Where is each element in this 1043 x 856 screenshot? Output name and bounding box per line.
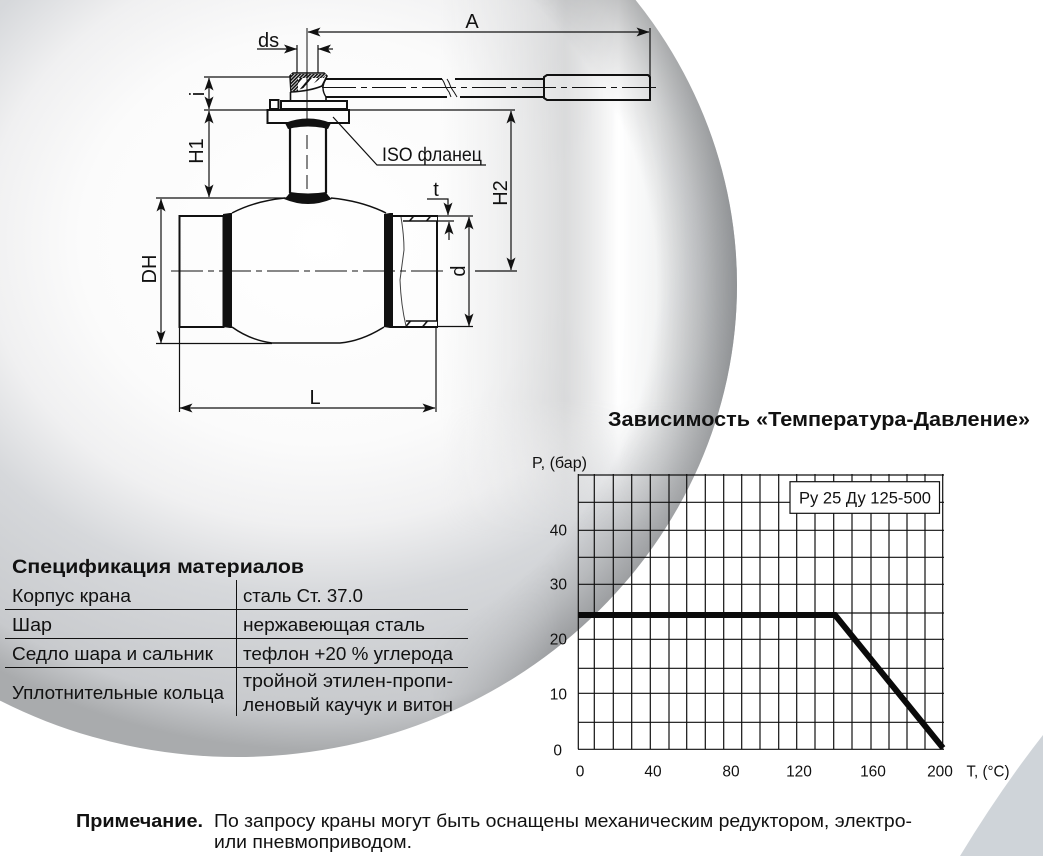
x axis labels: 80: [722, 764, 740, 780]
note: или пневмоприводом.: [214, 831, 412, 852]
background sphere: [0, 0, 740, 760]
table rows: Шар: [12, 614, 52, 635]
y axis labels: 10: [550, 686, 567, 704]
x axis labels: 120: [786, 764, 812, 780]
x axis labels: [576, 764, 1010, 780]
materials table: [5, 556, 468, 716]
dimension ds: [257, 30, 333, 73]
note: По запросу краны могут быть оснащены механическим редуктором, электро-: [214, 810, 912, 831]
x axis labels: 160: [860, 764, 886, 780]
table rows: Уплотнительные кольца: [12, 682, 225, 703]
table rows: Седло шара и сальник: [12, 643, 214, 664]
chart legend box: [790, 482, 940, 513]
table heading: Спецификация материалов: [12, 556, 304, 578]
table rows: леновый каучук и витон: [243, 694, 453, 715]
dimension H1: [156, 111, 286, 198]
dimension ds: ds: [258, 30, 279, 52]
valve body: [180, 198, 437, 343]
table rules: [5, 580, 468, 716]
temperature pressure chart: [532, 455, 1010, 780]
dimension H1: H1: [186, 138, 208, 164]
table rows: Корпус крана: [12, 585, 132, 606]
dimension L: L: [309, 387, 321, 409]
y axis labels: 20: [550, 632, 567, 648]
y axis labels: P, (бар): [532, 455, 587, 472]
neck: [284, 128, 332, 204]
dimension d: d: [448, 265, 470, 277]
y axis labels: 30: [550, 576, 567, 594]
y axis labels: [532, 455, 587, 760]
table rows: [12, 585, 454, 715]
dimension L: [180, 327, 436, 412]
table rows: тройной этилен-пропи-: [243, 670, 453, 691]
valve technical drawing: [139, 11, 656, 412]
stem flange: [268, 100, 349, 129]
dimension i: i: [187, 92, 209, 96]
dimension t: t: [433, 179, 439, 201]
ISO flange label: ISO фланец: [382, 144, 482, 166]
note: [76, 810, 912, 852]
x axis labels: 40: [644, 764, 662, 780]
handle: [290, 73, 650, 101]
dimension i: [187, 77, 515, 110]
dimension H2: H2: [490, 180, 512, 206]
table rows: сталь Ст. 37.0: [243, 585, 363, 606]
pressure curve: [578, 615, 943, 748]
dimension DH: DH: [139, 255, 161, 283]
ISO flange label: [333, 117, 486, 166]
x axis labels: T, (°C): [966, 764, 1010, 780]
center lines: [171, 28, 656, 271]
corner shape bottom right: [960, 735, 1043, 856]
table rows: тефлон +20 % углерода: [243, 643, 454, 664]
chart grid: [578, 474, 944, 749]
chart heading: Зависимость «Температура-Давление»: [608, 409, 1030, 431]
y axis labels: 40: [550, 522, 567, 540]
dimension d: [437, 216, 473, 326]
x axis labels: 200: [927, 764, 953, 780]
table rows: нержавеющая сталь: [243, 614, 425, 635]
x axis labels: 0: [576, 764, 585, 780]
chart legend box: Ру 25 Ду 125-500: [799, 490, 931, 508]
dimension A: A: [465, 11, 479, 33]
y axis labels: 0: [553, 742, 562, 760]
dimension t: [427, 179, 454, 240]
note: Примечание.: [76, 810, 203, 831]
